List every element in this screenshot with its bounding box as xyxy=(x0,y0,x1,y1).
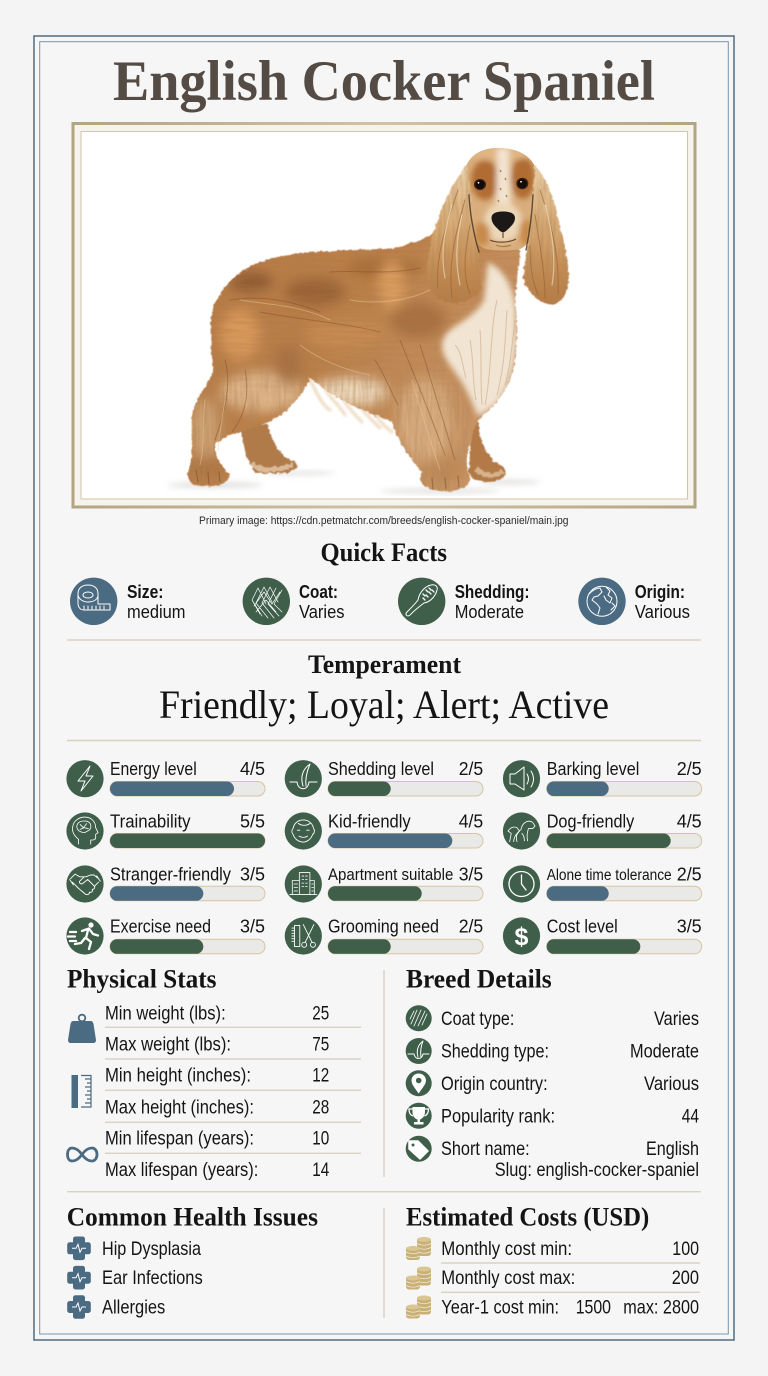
rating: grooming need xyxy=(285,915,483,955)
photo panel: dog xyxy=(73,124,695,507)
icon: medical cross xyxy=(67,1236,91,1260)
detail rows: Origin country: xyxy=(441,1073,548,1095)
text xyxy=(635,581,690,622)
label: Trainability xyxy=(110,810,191,832)
stat rows: 14 xyxy=(312,1159,329,1181)
value: 3/5 xyxy=(240,915,265,936)
detail rows: Various xyxy=(644,1073,699,1095)
ears xyxy=(427,165,568,304)
label: Barking level xyxy=(547,758,639,779)
value: 2/5 xyxy=(459,758,483,779)
detail rows: Popularity rank: xyxy=(441,1105,555,1127)
body and near legs xyxy=(188,231,520,491)
icon: location pin xyxy=(406,1070,432,1096)
row: year-1: max: 2800 xyxy=(623,1296,699,1318)
icon: runner xyxy=(66,917,104,955)
detail rows: Short name: xyxy=(441,1138,530,1160)
detail rows: 44 xyxy=(682,1105,699,1127)
icon: brush xyxy=(398,578,445,625)
rating: kid-friendly xyxy=(285,810,483,850)
icon: clock xyxy=(503,865,540,903)
bar xyxy=(547,886,702,901)
stat rows: Max weight (lbs): xyxy=(105,1034,231,1056)
temperament traits: Friendly; Loyal; Alert; Active xyxy=(159,682,609,727)
quick fact: origin xyxy=(578,578,690,625)
head xyxy=(466,148,536,250)
stat rows: 28 xyxy=(312,1096,329,1118)
icon: tag xyxy=(406,1136,432,1162)
icon: head with brain xyxy=(66,812,104,850)
rating: shedding level xyxy=(285,758,483,797)
value: 4/5 xyxy=(677,810,702,832)
text: Coat: xyxy=(299,581,338,602)
icon: medical cross xyxy=(67,1266,91,1290)
item: Ear Infections xyxy=(102,1267,203,1289)
value: 3/5 xyxy=(677,915,702,936)
label: Cost level xyxy=(547,915,618,936)
heading: Breed Details xyxy=(406,964,552,993)
icon: child face xyxy=(285,812,322,850)
stat rows: 25 xyxy=(312,1002,329,1024)
eyes xyxy=(474,178,528,190)
far legs xyxy=(240,405,505,481)
icon: coins xyxy=(406,1296,431,1318)
icon: buildings xyxy=(285,865,322,903)
value: 5/5 xyxy=(240,810,265,832)
row: monthly max xyxy=(441,1267,699,1289)
detail rows: Slug: english-cocker-spaniel xyxy=(495,1159,699,1181)
row: monthly min: Monthly cost min: xyxy=(441,1238,572,1260)
value: 2/5 xyxy=(677,758,702,779)
icon: dollar: $ xyxy=(515,923,529,951)
text: Various xyxy=(635,601,690,622)
illustration: English Cocker Spaniel xyxy=(186,148,570,493)
icon: ruler xyxy=(72,1075,91,1108)
quick fact: shedding xyxy=(398,578,530,625)
rating: apartment suitable xyxy=(285,864,483,903)
value: 4/5 xyxy=(240,758,265,779)
label: Stranger-friendly xyxy=(110,864,232,885)
rating: alone time tolerance xyxy=(503,864,702,903)
stat rows: 12 xyxy=(312,1065,329,1087)
stat rows: 10 xyxy=(312,1127,329,1149)
stat rows: 75 xyxy=(312,1034,329,1056)
detail rows xyxy=(441,1008,699,1181)
rating: exercise need xyxy=(66,915,265,955)
icon: coins xyxy=(406,1237,431,1260)
stat rows: Max height (inches): xyxy=(105,1096,254,1118)
text: Size: xyxy=(127,581,164,602)
title: English Cocker Spaniel xyxy=(113,50,655,113)
bar xyxy=(547,782,702,796)
row: monthly min xyxy=(441,1238,699,1260)
icon: weight xyxy=(68,1015,96,1043)
bar xyxy=(328,939,483,954)
label: Exercise need xyxy=(110,915,211,936)
detail rows: Moderate xyxy=(630,1040,699,1062)
text xyxy=(455,581,530,622)
icon: coat type xyxy=(406,1005,432,1031)
label: Energy level xyxy=(110,758,197,779)
heading: Common Health Issues xyxy=(67,1203,318,1232)
icon: handshake xyxy=(66,865,104,903)
heading: Physical Stats xyxy=(67,964,216,993)
label: Apartment suitable xyxy=(328,866,453,884)
rating: stranger-friendly xyxy=(66,864,265,903)
text: Moderate xyxy=(455,601,524,622)
bar xyxy=(547,834,702,848)
panel: estimated costs xyxy=(406,1203,700,1318)
rating: energy level xyxy=(66,758,265,797)
nose xyxy=(492,212,515,232)
heading: quick facts: Quick Facts xyxy=(320,538,447,567)
row: monthly max: Monthly cost max: xyxy=(441,1267,575,1289)
icon: tape measure xyxy=(70,578,117,625)
panel: physical stats xyxy=(67,964,361,1181)
ground shadow xyxy=(167,471,540,494)
bar xyxy=(328,834,483,848)
text xyxy=(299,581,344,622)
icon: coat texture xyxy=(243,578,290,625)
mouth xyxy=(490,232,516,242)
value: 3/5 xyxy=(459,864,483,885)
stat rows: Min weight (lbs): xyxy=(105,1002,226,1024)
bar xyxy=(328,782,483,796)
label: Dog-friendly xyxy=(547,810,635,832)
value: 2/5 xyxy=(677,864,702,885)
quick fact: coat xyxy=(243,578,344,625)
detail rows: Shedding type: xyxy=(441,1040,549,1062)
coat shading xyxy=(188,236,520,491)
panel: common health issues xyxy=(67,1203,318,1319)
heading: temperament: Temperament xyxy=(308,650,461,679)
row: year-1: 1500 xyxy=(576,1296,611,1318)
label: Kid-friendly xyxy=(328,810,411,832)
text: Shedding: xyxy=(455,581,530,602)
panel: breed details xyxy=(406,964,699,1181)
row: monthly max: 200 xyxy=(672,1267,699,1289)
icon: dollar xyxy=(503,917,540,955)
icon: globe xyxy=(578,578,626,625)
row: monthly min: 100 xyxy=(672,1238,699,1260)
bar xyxy=(547,939,702,954)
heading: Estimated Costs (USD) xyxy=(406,1203,649,1232)
rating: trainability xyxy=(66,810,265,850)
icon: speaker xyxy=(503,760,540,797)
detail rows: Varies xyxy=(654,1008,699,1030)
icon: medical cross xyxy=(67,1295,91,1319)
value: 4/5 xyxy=(459,810,483,832)
detail rows: Coat type: xyxy=(441,1008,514,1030)
item: Allergies xyxy=(102,1296,165,1318)
detail rows: English xyxy=(646,1138,699,1160)
icon: trophy xyxy=(406,1103,432,1129)
fur strands xyxy=(196,268,459,489)
row: year-1: Year-1 cost min: xyxy=(441,1296,559,1318)
label: Shedding level xyxy=(328,758,434,779)
row: year-1 xyxy=(441,1296,699,1318)
image caption: Primary image: https://cdn.petmatchr.com/breeds/english-cocker-spaniel/main.jpg xyxy=(199,515,568,527)
icon: shedding type xyxy=(406,1038,432,1064)
label: Alone time tolerance xyxy=(547,867,672,884)
icon: comb and scissors xyxy=(285,917,322,955)
text: Origin: xyxy=(635,581,685,602)
ear strands xyxy=(431,165,568,304)
quick fact: size xyxy=(70,578,186,625)
ear shadow lines xyxy=(469,195,533,252)
stat rows: Min lifespan (years): xyxy=(105,1127,254,1149)
bar xyxy=(110,886,265,901)
bar xyxy=(110,939,265,954)
text: medium xyxy=(127,601,186,622)
icon: two dogs xyxy=(503,812,540,850)
text xyxy=(127,581,186,622)
stat rows xyxy=(105,1002,361,1181)
image frame xyxy=(73,124,695,507)
item: Hip Dysplasia xyxy=(102,1238,201,1260)
stat rows: Max lifespan (years): xyxy=(105,1159,258,1181)
belly fringe xyxy=(310,380,392,432)
bar xyxy=(110,834,265,848)
icon: infinity xyxy=(68,1148,97,1161)
stat rows: Min height (inches): xyxy=(105,1065,251,1087)
rating: cost level xyxy=(503,915,702,955)
label: Grooming need xyxy=(328,915,439,936)
icon: hair follicle xyxy=(285,760,322,797)
value: 2/5 xyxy=(459,915,483,936)
bar xyxy=(328,886,483,901)
icon: lightning xyxy=(66,760,104,797)
value: 3/5 xyxy=(240,864,265,885)
rating: barking level xyxy=(503,758,702,797)
cream chest xyxy=(442,262,516,416)
text: Varies xyxy=(299,601,344,622)
icon: coins xyxy=(406,1266,431,1290)
bar xyxy=(110,782,265,796)
rating: dog-friendly xyxy=(503,810,702,850)
